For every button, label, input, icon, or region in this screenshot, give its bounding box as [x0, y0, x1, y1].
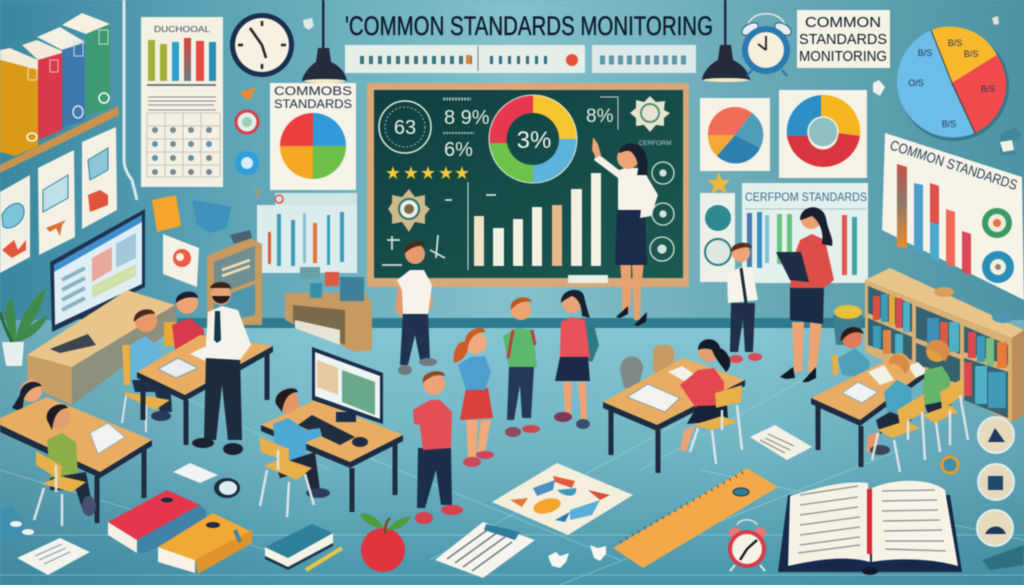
- sign: Common Standards Monitoring: COMMON: [805, 14, 881, 31]
- bookcase front: [865, 280, 1012, 422]
- green student chair: [922, 378, 968, 452]
- red book: [108, 490, 206, 553]
- bars: [747, 212, 857, 275]
- tablet: [776, 252, 809, 282]
- desk top: [261, 400, 403, 462]
- poster title: CERFPOM STANDARDS: [745, 190, 867, 204]
- shoes: [398, 365, 412, 375]
- wall scraps right: [992, 16, 1022, 155]
- girl in red skirt: [454, 328, 494, 467]
- banner strip right: [592, 45, 696, 73]
- wall scrap: [303, 18, 314, 30]
- sign: Common Standards Monitoring: [797, 10, 890, 68]
- girl: [680, 339, 730, 452]
- pie labels: B/S: [981, 84, 995, 94]
- bars: [897, 164, 971, 275]
- shirt: [458, 356, 491, 390]
- legs: [792, 322, 822, 372]
- classroom computer monitor: [50, 209, 145, 332]
- clipboard document: [435, 522, 535, 578]
- desk legs: [97, 448, 144, 523]
- wall star: [708, 172, 730, 194]
- head: [801, 209, 821, 229]
- skirt: [460, 388, 493, 420]
- lamp left: [302, 0, 347, 83]
- alarm clock: [740, 14, 793, 76]
- binder red: [22, 40, 62, 140]
- pencil: [306, 548, 342, 570]
- shoes: [729, 355, 743, 363]
- small wall icons: [235, 87, 261, 201]
- desk with three students: [811, 327, 968, 472]
- floor paper small: [173, 463, 218, 483]
- sign: Common Standards Monitoring: STANDARDS: [799, 31, 887, 48]
- wall pipe: [124, 0, 137, 200]
- floor scrap right: [982, 545, 1024, 570]
- large pie chart: [897, 26, 1009, 141]
- poster table: [147, 113, 220, 177]
- percent stats: 6%: [444, 139, 473, 161]
- banner strip left: [345, 45, 585, 73]
- bookcase: [865, 268, 1024, 422]
- trousers: [204, 355, 242, 440]
- waste basket: [833, 305, 863, 345]
- shoes: [415, 512, 433, 524]
- rating stars: ★: [454, 163, 470, 183]
- hair: [619, 143, 648, 175]
- desk legs: [611, 410, 658, 473]
- desk with girl in red: [603, 339, 745, 473]
- binder blue: [37, 27, 85, 128]
- floor paper: [17, 538, 90, 575]
- chalk doodles: [382, 195, 496, 265]
- shoes: [192, 438, 214, 448]
- percent stats: 8 9%: [444, 107, 490, 129]
- gear top: [630, 96, 670, 132]
- hair: [800, 207, 832, 246]
- head: [211, 285, 231, 305]
- rating stars: [385, 163, 470, 183]
- red alarm clock: [728, 520, 766, 571]
- head: [617, 147, 639, 169]
- shelf decoration: [934, 287, 954, 297]
- boy chair: [872, 394, 925, 472]
- shirt: [727, 267, 758, 303]
- green shirt student: [922, 340, 953, 420]
- white wall badge: [873, 80, 885, 96]
- desk top: [0, 397, 152, 472]
- floor: [0, 320, 1024, 585]
- wall chart poster: [257, 193, 357, 273]
- pie labels: B/S: [964, 49, 978, 59]
- blue shirt boy: [866, 353, 912, 455]
- shoes: [505, 427, 521, 437]
- backpack: [586, 322, 599, 362]
- donut chart: 3%: [517, 127, 551, 154]
- standing boy near board: [395, 241, 437, 375]
- boy in red shirt: [413, 371, 463, 524]
- pie: [708, 107, 763, 163]
- skirt: [790, 286, 824, 324]
- backpack straps: [508, 330, 535, 358]
- cabinet with supplies: [285, 267, 372, 352]
- floor paper: [750, 425, 812, 460]
- poster bars: [148, 38, 216, 81]
- orange book: [158, 513, 252, 574]
- wall poster left 1: [0, 175, 30, 273]
- bookcase side: [1012, 330, 1024, 422]
- background students behind desk: [620, 345, 674, 388]
- wall clock: [230, 13, 294, 77]
- shirt: [397, 270, 432, 314]
- left page: [788, 482, 870, 566]
- hand: [592, 137, 601, 158]
- bar chart: [468, 173, 601, 270]
- rating stars: ★: [385, 163, 401, 183]
- floor disk: [214, 478, 240, 498]
- chair: [259, 437, 314, 517]
- blue shirt student: [122, 309, 172, 432]
- crumpled paper flowers: [548, 545, 606, 568]
- notebook: [90, 423, 125, 454]
- potted plant: [0, 288, 48, 366]
- poster: Cerfrom Standards: [742, 183, 868, 283]
- boy: [273, 388, 330, 498]
- desk legs: [352, 442, 395, 512]
- girl: [12, 380, 44, 440]
- score ring: 63: [394, 117, 416, 139]
- pie labels: B/S: [918, 48, 932, 58]
- binder green: [62, 13, 110, 116]
- board percent label: [586, 97, 618, 130]
- bookcase top: [865, 268, 1024, 338]
- head: [562, 293, 582, 313]
- poster: Duchoal bar chart and grid: [141, 17, 223, 187]
- trousers: [730, 303, 755, 352]
- desk legs: [818, 403, 861, 467]
- gear bottom: [388, 189, 430, 232]
- wall bunting: [192, 200, 231, 233]
- tie: [214, 311, 221, 343]
- side circles: [650, 162, 674, 261]
- board frame: [367, 83, 689, 287]
- teacher in white shirt: [192, 282, 251, 455]
- pie labels: B/S: [948, 38, 962, 48]
- ruler: [613, 468, 778, 568]
- wall poster left 2: [38, 150, 75, 255]
- percent stats: [443, 99, 490, 161]
- poster: donut: [779, 90, 867, 178]
- title: 'COMMON STANDARDS MONITORING: [345, 11, 713, 41]
- apple: [360, 514, 411, 572]
- pie labels: O/S: [908, 78, 924, 88]
- floor decoration left: [0, 505, 34, 545]
- boy in green shirt: [503, 297, 540, 437]
- keyboard: [298, 415, 355, 445]
- red shirt student: [164, 292, 204, 350]
- boy: [47, 404, 96, 516]
- rating stars: ★: [420, 163, 436, 183]
- hair: [423, 371, 445, 383]
- desk legs: [143, 352, 267, 445]
- poster: Commobs Standards pie: [270, 83, 356, 190]
- floor gear: [942, 457, 958, 473]
- blue shirt student: [832, 327, 870, 378]
- lamp right: [702, 0, 750, 82]
- hair: [511, 297, 532, 310]
- poster: badges: [700, 193, 735, 282]
- binder yellow: [0, 48, 38, 156]
- trousers: [507, 367, 534, 420]
- rating stars: ★: [403, 163, 419, 183]
- small wall icons: ?: [253, 187, 261, 201]
- head: [732, 244, 750, 262]
- right page: [872, 481, 958, 566]
- score ring: [379, 101, 431, 153]
- monitor stand: [80, 307, 122, 327]
- small shelf back wall: [207, 230, 262, 325]
- head: [465, 332, 487, 354]
- notebooks: [842, 382, 878, 403]
- shoes: [463, 457, 481, 467]
- wall background: [0, 0, 1024, 320]
- poster title: COMMOBS: [274, 84, 352, 98]
- pie chart: [280, 113, 346, 179]
- poster: Commobs Standards pie: STANDARDS: [274, 97, 352, 111]
- donut chart: [489, 95, 577, 183]
- chalk tray items: [568, 275, 608, 283]
- computer desk with boy: [259, 347, 403, 517]
- legs and shoes: [620, 262, 644, 320]
- girl with backpack: [554, 290, 599, 429]
- desk top: [137, 335, 273, 395]
- paper: [627, 384, 680, 412]
- desk top: [603, 358, 745, 425]
- shirt and arms: [594, 153, 658, 218]
- board percent label: 8%: [586, 106, 614, 127]
- shirt: [205, 306, 251, 360]
- wall poster left 3: [82, 127, 117, 229]
- right badges: [977, 417, 1014, 546]
- head: [405, 244, 425, 264]
- donut: [787, 95, 860, 167]
- chair: [690, 385, 742, 464]
- open book: [778, 481, 962, 575]
- shirt: [560, 317, 590, 358]
- shoes: [554, 412, 572, 422]
- teacher pointing at board: [592, 137, 658, 326]
- hair: [454, 328, 485, 363]
- notebook: [158, 358, 198, 378]
- hair: [731, 243, 752, 252]
- arms: [395, 285, 433, 318]
- trousers: [417, 448, 452, 508]
- desk top: [811, 360, 930, 420]
- shelf with binders: [0, 13, 119, 173]
- pie labels: [908, 38, 995, 129]
- back desk: [27, 290, 178, 405]
- shelf board: [0, 106, 119, 173]
- baseboard: [172, 318, 872, 328]
- hair: [405, 241, 426, 253]
- head: [423, 373, 445, 395]
- shirt: [413, 400, 452, 450]
- desk with girl and boy: [0, 380, 152, 526]
- legs: [563, 382, 587, 420]
- skewed poster: Common Standards: [882, 133, 1024, 300]
- bookmark: [867, 489, 872, 554]
- sign: Common Standards Monitoring: MONITORING: [799, 48, 887, 65]
- pie labels: B/S: [942, 119, 956, 129]
- sticker poster: [163, 234, 199, 287]
- desk with two students: [122, 292, 273, 445]
- hair: [561, 290, 590, 318]
- poster title: DUCHOOAL: [154, 24, 210, 34]
- chalkboard: [367, 83, 689, 287]
- book cover: [778, 495, 962, 572]
- chair: [34, 451, 86, 526]
- floor chart sheet: [492, 463, 633, 535]
- head: [511, 300, 531, 320]
- monitor: [312, 347, 383, 424]
- teacher with tablet: [776, 207, 834, 382]
- small blue book: [265, 524, 333, 570]
- board label: CERFORM: [639, 140, 671, 147]
- skirt: [615, 208, 647, 265]
- shirt: [503, 328, 537, 367]
- beard: [212, 296, 230, 304]
- rating stars: ★: [438, 163, 454, 183]
- legs: [466, 420, 491, 460]
- books: [873, 294, 1007, 408]
- skirt: [555, 357, 590, 381]
- shirt: [790, 234, 834, 288]
- page lines: [798, 486, 946, 553]
- trousers: [400, 312, 430, 365]
- sticky note: [152, 195, 181, 232]
- rings: [982, 208, 1014, 283]
- boy with white shirt: [727, 243, 762, 363]
- poster: small pie: [700, 98, 770, 171]
